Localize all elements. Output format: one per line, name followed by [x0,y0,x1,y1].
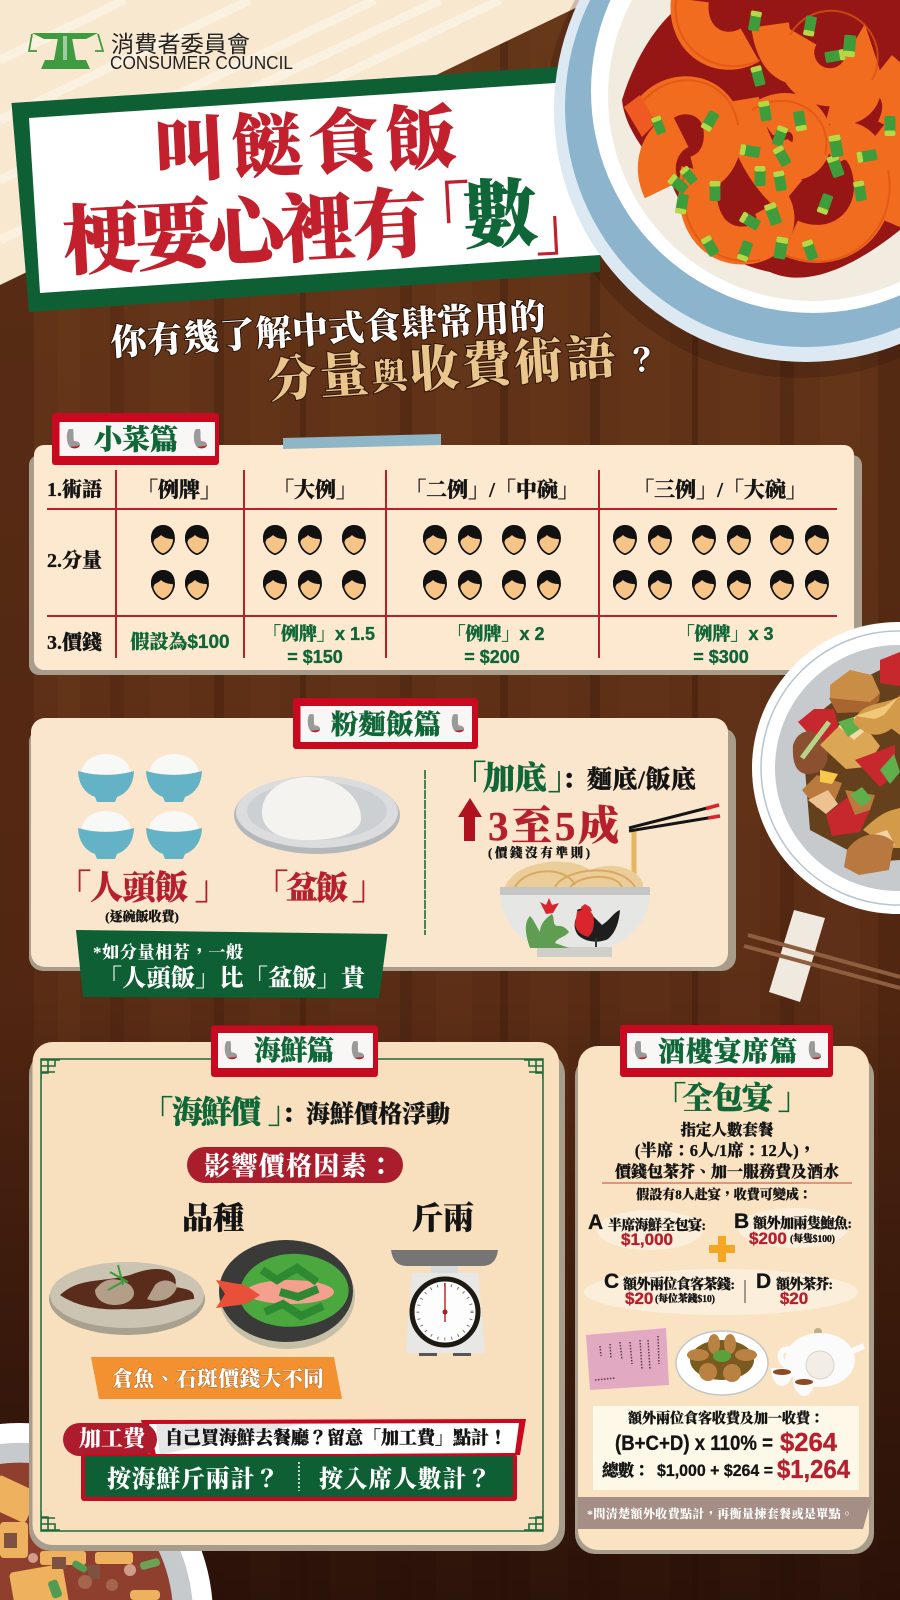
row 2: portions [47,525,829,599]
description: set menu [615,1120,839,1181]
heading: extra noodles: 「 [453,760,486,797]
row 3: prices: 「例牌」x 3 [676,623,774,644]
cream paper corner [0,0,592,285]
label: per-head rice [57,869,229,907]
note: per-bowl charge: (逐碗飯收費) [105,909,179,925]
heading: extra noodles: 加底 [483,760,547,796]
row 3: prices: = $150 [287,647,343,667]
heading: extra noodles: 」 [548,761,581,797]
calculation box: 總數： [602,1460,650,1480]
plant [526,898,569,948]
tofu and minced pork [0,1474,161,1600]
badge: small dishes [52,413,219,465]
heading: seafood price: 海鮮價 [172,1095,265,1130]
faces: large portion [263,525,366,599]
item B: 額外加兩隻鮑魚: [752,1215,852,1232]
icon: plus [709,1236,735,1262]
item C: C [604,1270,619,1293]
label: plate rice: 「 [254,869,288,907]
badge: small dishes: 小菜篇 [94,424,178,456]
separator [744,1280,746,1303]
description: set menu: (半席：6人/1席：12人)， [635,1140,815,1160]
heading: all-inclusive banquet: 「 [655,1081,686,1116]
callout: rice comparison: *如分量相若，一般 [93,942,243,962]
callout: processing fee: 按入席人數計？ [319,1465,491,1493]
row 1: terms: 「例牌」 [137,478,221,502]
logo: Consumer Council [29,31,293,73]
icon: steamed fish [216,1240,355,1349]
logo Chinese name: 消費者委員會 [111,31,250,57]
row 1: terms [47,478,807,502]
heading: seafood price [142,1095,450,1130]
heading: species: 品種 [182,1201,244,1236]
title line 2: 梗要心裡有 [61,182,430,285]
icon: abalone plate [676,1331,768,1395]
callout: processing fee [63,1419,526,1501]
background ellipses [584,1208,858,1315]
title banner [12,64,600,312]
heading: extra noodles: ： [562,767,587,794]
heading: seafood price: 「 [142,1095,173,1130]
logo English name: CONSUMER COUNCIL [110,53,293,73]
icon: kitchen scale [391,1250,498,1356]
divider [602,1182,852,1184]
heading: extra noodles: 麵底/飯底 [587,765,696,794]
label: per-head rice: 」 [195,870,229,907]
row 3: prices: 3.價錢 [47,630,102,654]
heading: all-inclusive banquet [655,1081,809,1116]
row 2: portions: 2.分量 [47,548,102,572]
note: no fixed price: (價錢沒有準則) [488,845,590,860]
panel: noodles and rice [29,698,736,998]
row 1: terms: 「二例」/「中碗」 [405,478,579,502]
badge: banquet: 酒樓宴席篇 [658,1036,797,1067]
panel: small dishes [29,413,862,675]
label: plate rice: 盆飯 [286,870,348,906]
row 3: prices: = $300 [693,647,749,667]
calculation box: $264 [780,1427,838,1457]
callout: processing fee: 加工費 [79,1426,149,1451]
title line 2: 數 [461,174,540,259]
faces: double portion [423,525,561,599]
note: ask about extra charges: *問清楚額外收費點計，再衡量揀套餐或是單點。 [587,1506,853,1521]
decorative frame [41,1059,543,1531]
calculation box [593,1406,859,1490]
text: assume eight guests: 假設有8人赴宴，收費可變成： [636,1187,812,1203]
badge: noodles and rice: 粉麵飯篇 [331,709,441,740]
title line 2: 」 [534,194,597,263]
item A: 半席海鮮全包宴: [608,1217,706,1234]
description: set menu: 指定人數套餐 [680,1120,774,1139]
stew food [793,652,900,875]
item A [588,1211,706,1249]
row 1: terms: 1.術語 [47,478,102,501]
shrimp plate shadow [544,0,900,378]
row 3: prices: 「例牌」x 2 [447,623,545,644]
heading: seafood price: ： [282,1102,306,1128]
item C: 額外兩位食客茶錢: [622,1276,735,1293]
faces: triple portion [613,525,829,599]
item B: (每隻$100) [790,1232,835,1245]
calculation box: 額外兩位食客收費及加一收費： [627,1410,824,1427]
item D: 額外茶芥: [775,1276,833,1293]
text: three to five: 3至5成 [488,803,619,849]
rooster [575,904,620,947]
item D: D [756,1270,771,1293]
callout: processing fee: 自己買海鮮去餐廳？留意「加工費」點計！ [165,1427,507,1448]
heading: all-inclusive banquet: 」 [778,1081,809,1116]
heading: extra noodles [453,760,696,797]
item C: $20 [625,1289,653,1308]
badge: banquet [620,1025,833,1077]
icon: fish in brown sauce [49,1262,205,1335]
icon: noodle bowl with rooster [500,805,720,957]
heading: weight: 斤兩 [412,1201,474,1236]
spring onion [651,10,895,262]
subtitle line 1: 你有幾了解中式食肆常用的 [109,297,547,363]
callout: rice comparison [76,930,388,998]
calculation box: $1,264 [777,1454,850,1484]
label: per-head rice: 「 [57,869,91,907]
calculation box: $1,000 + $264 = [657,1461,773,1480]
item B [734,1210,852,1248]
faces: regular portion [151,525,209,599]
label: fish price [91,1357,342,1399]
heading: all-inclusive banquet: 全包宴 [682,1081,773,1116]
tape [283,434,441,449]
label: plate rice [254,869,386,907]
item C [604,1270,735,1308]
divider [424,770,426,935]
pill: price factors: 影響價格因素： [204,1151,394,1181]
icon: chopsticks on rest [744,910,900,1002]
heading: seafood price: 海鮮價格浮動 [306,1101,450,1128]
item C: (每位茶錢$10) [655,1292,715,1305]
item A: $1,000 [621,1230,673,1249]
item D [756,1270,833,1308]
icon: four rice bowls [78,754,202,859]
row 3: prices: 「例牌」x 1.5 [263,623,375,644]
panel: banquet [575,1025,874,1554]
row 3: prices: = $200 [464,647,520,667]
calculation box: (B+C+D) x 110% = [615,1432,773,1455]
row 1: terms: 「大例」 [273,478,357,502]
badge: seafood: 海鮮篇 [254,1036,334,1066]
row 3: prices: 假設為$100 [130,630,230,653]
logo icon: scales [29,33,103,69]
note: ask about extra charges [578,1497,872,1529]
icon: menu paper [586,1328,669,1390]
row 1: terms: 「三例」/「大碗」 [633,478,807,502]
item D: $20 [780,1289,808,1308]
title line 2: 「 [403,178,472,255]
subtitle [109,297,663,408]
shrimp food [622,0,900,278]
plate with stew [752,622,900,914]
label: fish price: 倉魚、石斑價錢大不同 [112,1367,324,1391]
badge: noodles and rice [293,698,478,749]
plate with mapo tofu [0,1423,212,1600]
icon: up arrow [458,798,482,841]
label: plate rice: 」 [352,870,386,907]
callout: rice comparison: 「人頭飯」比「盆飯」貴 [98,964,369,992]
item B: B [734,1210,749,1233]
description: set menu: 價錢包茶芥、加一服務費及酒水 [615,1162,839,1181]
badge: seafood [211,1026,378,1077]
panel: seafood [29,1026,565,1551]
icon: teapot and cups [771,1328,864,1396]
plate with shrimp [554,0,900,362]
row 3: prices [47,623,774,667]
callout: processing fee: 按海鮮斤兩計？ [107,1465,279,1493]
item A: A [588,1211,603,1234]
label: per-head rice: 人頭飯 [90,870,188,907]
icon: rice on plate [234,776,400,854]
item B: $200 [749,1229,787,1248]
subtitle line 2: 分量與收費術語？ [266,326,663,408]
heading: seafood price: 」 [268,1095,299,1130]
title line 2 [61,171,597,287]
title line 1: 叫餸食飯 [153,100,458,192]
table grid [47,470,837,658]
